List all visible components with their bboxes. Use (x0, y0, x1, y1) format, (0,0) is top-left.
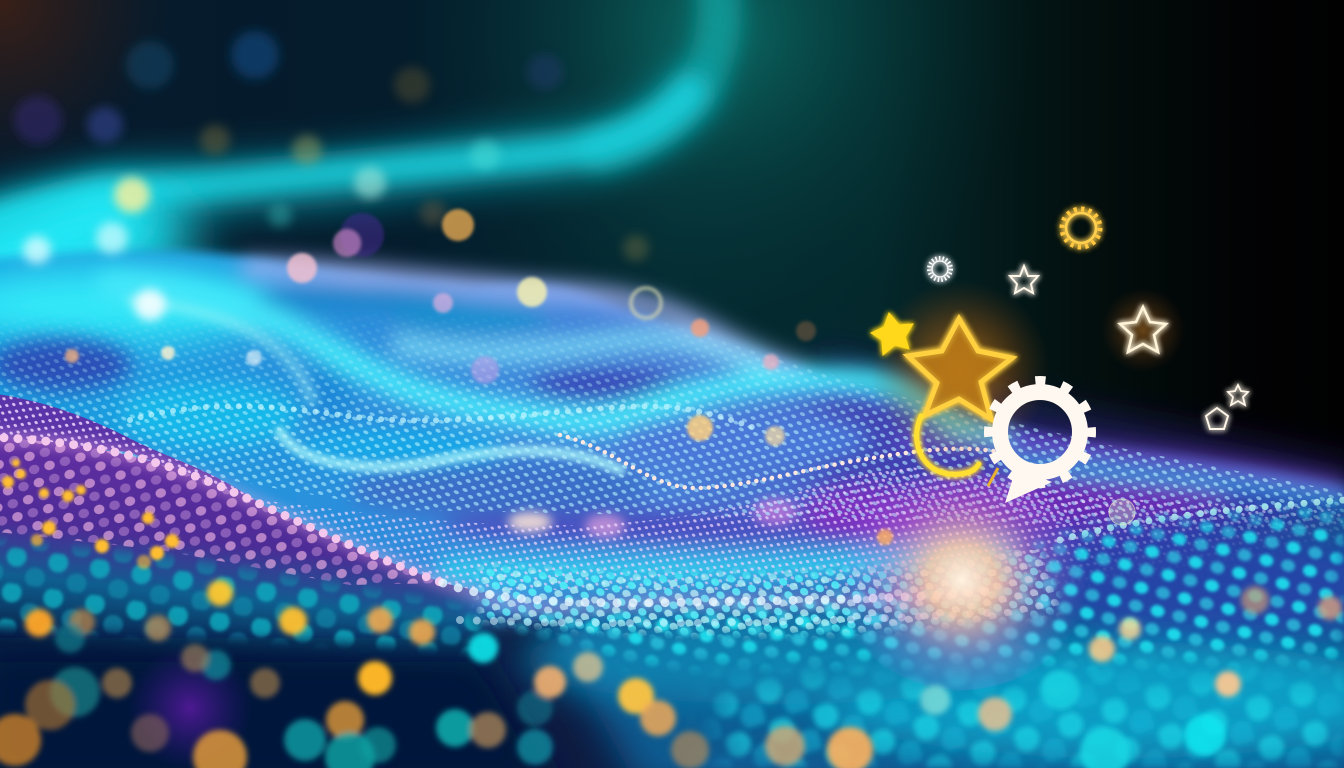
teal dot rows left (0, 537, 500, 655)
fine particle texture on the wave (0, 322, 1344, 590)
front left purple surface (0, 438, 498, 662)
icon: small filled yellow star (871, 313, 913, 355)
bright dotted wave rows (130, 406, 1344, 540)
icon: small white outline star (1010, 266, 1038, 293)
icon: small white sun gear (929, 258, 951, 280)
cyan dots on front surface (478, 500, 1344, 673)
glow behind outline star (1101, 288, 1185, 372)
small cyan dots along ridge (473, 550, 1064, 641)
dark base under lower left foreground (0, 620, 720, 768)
mid bokeh lights (65, 209, 893, 545)
upper bokeh lights (14, 31, 649, 321)
pale curved highlight bands (130, 300, 797, 538)
icon: tiny outline star (1228, 385, 1248, 405)
icon: large gold star (908, 319, 1012, 419)
purple fine-dot hump (0, 394, 264, 506)
icon: tiny outline pentagon star (1206, 408, 1228, 429)
warm glow on the wave (837, 470, 1087, 690)
small amber dots on purple ridge (2, 459, 179, 569)
lower dark foreground (0, 505, 1344, 768)
back wave surface (0, 251, 1344, 768)
glowing cyan ribbon (0, 0, 719, 280)
icon: white outline star right (1120, 307, 1166, 352)
icon: gold sun gear (1062, 209, 1100, 247)
glow behind large star (870, 280, 1050, 460)
small pale ring (631, 288, 661, 318)
icon: white gear speech bubble (990, 382, 1090, 503)
icon: yellow crescent hook (917, 416, 979, 474)
large out-of-focus cyan dots (704, 662, 1344, 768)
icon cluster (870, 209, 1248, 503)
floating bubble (1109, 499, 1135, 525)
wave colour swaths and light bands (0, 268, 1344, 572)
lower bokeh lights (0, 580, 1342, 768)
icon: amber spark (988, 468, 998, 486)
bright ridge of dots (0, 437, 1000, 623)
